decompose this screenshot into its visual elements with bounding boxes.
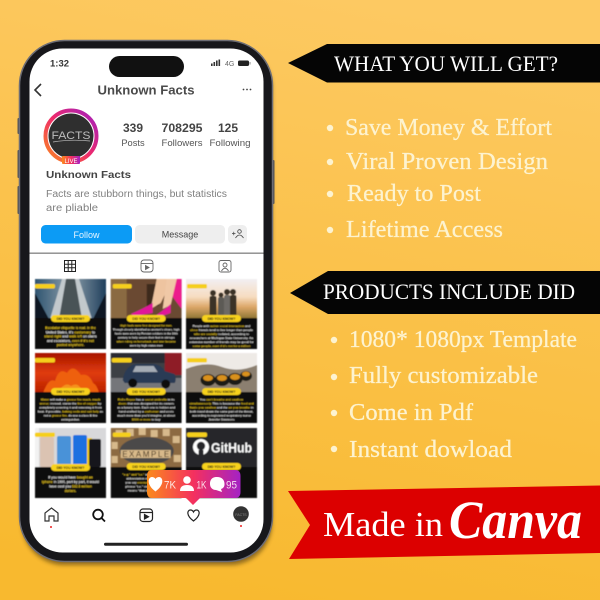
products list: Come in Pdf [349,400,473,426]
post: fire: Water will make a grease fire much, much [41,398,100,402]
add friend button [228,225,247,244]
post: escalator: posted anywhere. [57,343,85,347]
post: luxury car: doors that was designed for its owners [118,402,174,406]
post: luxury car: Rolls-Royce has a secret umbrella in its [118,398,175,402]
post: phones: dollars. [65,489,76,493]
post: escalator: DID YOU KNOW? [57,317,84,321]
post: friends at sunset: some people, even if it's not for a million [193,344,251,348]
post: heels: when riding on horseback, and later became [116,340,176,344]
tab icons [64,260,231,272]
post: fire: heat. If possible, baking soda and salt help as [38,410,103,414]
avatar: LIVE [64,159,78,165]
post: GitHub [185,427,258,499]
banner: products include [290,271,600,314]
post: escalator: Escalator etiquette is real. In the [45,326,96,330]
icon: reels [140,509,152,522]
post: cut fruit: You can't breathe and swallow [200,398,244,402]
post: heels: Though closely identified as women's shoes, high [113,328,180,332]
post: example tiles: phrase "i.e." stands for id est [125,484,167,488]
post: escalator: and escalators, even if it's not [47,339,95,343]
post: luxury car: much more than you'd imagine, at about [117,414,175,418]
icon: heart [149,477,162,492]
post: example tiles: abbreviation of the Latin for [126,476,167,480]
bottom navigation [45,506,249,528]
post: cut fruit: fluids you swallow and the air you breathe in [190,406,254,410]
profile stats: Followers [162,138,203,148]
notification bubble: 95 [226,480,237,492]
avatar [46,110,96,165]
post: GitHub: GitHub [211,440,252,456]
post: cut fruit: both travel down the same part of the throat, [190,410,253,414]
profile stats [121,121,250,148]
post: example tiles: means "that is" in English [128,488,165,492]
banner: what you will get: WHAT YOU WILL GET? [334,51,558,76]
status bar [50,58,250,70]
products list: Instant dowload [349,437,512,463]
icon: person [180,476,194,491]
message button: Message [162,230,198,240]
post: friends at sunset: extensive number of friends may be good for [189,340,254,344]
post: friends at sunset: close friends tend to live longer than people [190,328,253,332]
post: heels: High heels were first designed for men. [120,324,173,328]
post: escalator: United States, it's customary to [46,330,95,334]
ribbon: made in canva: Made in [323,505,443,544]
icon: profile avatar [233,506,249,527]
post: GitHub: GitHub hosts over [207,472,237,476]
post: fire [34,352,107,424]
benefits list: Ready to Post [347,181,481,207]
icon: home [45,508,58,528]
post: escalator: stand right and walk left on stairs [44,335,97,339]
post: luxury car [110,352,182,424]
follow button [41,225,132,244]
post: luxury car: hand-crafted by a craftsman and costs [119,410,174,414]
post: heels: worn by high status men [129,344,163,348]
post: fire: worse; instead, starve the fire of oxygen by [39,402,102,406]
benefits list: Save Money & Effort [345,115,552,141]
banner: products include: PRODUCTS INCLUDE DID [323,279,575,304]
profile stats: 708295 [162,121,203,135]
message button [135,225,225,244]
post: friends at sunset: researchers at Michigan State University. An [190,336,253,340]
post: friends at sunset: who are socially isolated, according to [193,332,249,336]
icon: search [93,510,105,522]
avatar: FACTS [52,130,90,142]
post: friends at sunset: People with active social interaction and [193,324,251,328]
icon: activity heart [188,510,199,521]
notification bubble [147,470,240,505]
home indicator [104,543,188,546]
post: luxury car: DID YOU KNOW? [132,390,160,394]
post: heels: heels were worn by Persian soldiers in the 10th [115,332,178,336]
post: example tiles: you say exempli gratia which [125,480,167,484]
profile bio: are pliable [46,203,98,214]
post: luxury car: as a luxury item. Each one is hidden and [117,406,175,410]
post: GitHub: millions of projects [206,477,237,481]
post: friends at sunset [185,279,258,350]
icon: grid tab [64,260,76,272]
post: fire: extinguisher. [61,418,80,422]
post: phones: have cost you $32.8 million [49,484,92,488]
post grid [35,279,257,498]
post: cut fruit: simultaneously. This is because the food and [189,402,254,406]
profile header [35,84,251,98]
ribbon: made in canva: Canva [449,490,582,550]
post: cut fruit [185,353,258,424]
post: heels: century to help secure their feet in stirrups [118,336,175,340]
products list [331,327,577,463]
post: fire: not a grease fire, do use a class B fire [44,414,98,418]
post: friends at sunset: DID YOU KNOW? [208,317,235,321]
post: fire: DID YOU KNOW? [57,390,84,394]
post: example tiles: "e.g." and "i.e." are not the same. [122,472,170,476]
ribbon: made in canva [288,486,600,559]
post: cut fruit: DID YOU KNOW? [208,390,235,394]
banner: what you will get [288,44,600,82]
follow button: Follow [73,230,100,240]
notification bubble: 7K [164,480,177,492]
profile bio [46,169,227,214]
post: phones: iphone in 1990, part by part, it would [42,480,99,484]
profile header: Unknown Facts [98,84,195,98]
post: GitHub: DID YOU KNOW? [208,465,235,469]
icon: comment bubble [210,477,224,492]
post: phones: If you would have bought an [48,476,93,480]
post: phones: DID YOU KNOW? [57,466,84,470]
post: escalator [34,278,107,350]
post: phones [34,428,107,499]
phone mockup [18,40,274,565]
products list: Fully customizable [349,363,538,389]
products list: 1080* 1080px Template [349,327,577,353]
notification bubble: 1K [196,480,207,492]
profile stats: 125 [218,121,238,135]
benefits list [327,115,552,243]
profile stats: Posts [121,138,145,148]
post: fire: completely covering it and removing it from [39,406,102,410]
icon: reels tab [141,260,153,272]
post: example tiles: EXAMPLE [122,450,169,459]
post: heels: DID YOU KNOW? [132,317,160,321]
benefits list: Viral Proven Design [346,149,548,175]
post: luxury car: $500 or more to buy [132,418,161,422]
profile stats: Following [210,138,250,148]
icon: tagged tab [219,260,231,272]
icon: profile avatar: FACTS [235,513,247,517]
post: cut fruit: according to registered respiratory nurse [192,414,251,418]
status bar: 1:32 [50,58,69,70]
post: example tiles: DID YOU KNOW? [132,465,160,469]
profile bio: Unknown Facts [46,169,131,181]
profile bio: Facts are stubborn things, but statistics [46,189,227,200]
benefits list: Lifetime Access [346,217,503,243]
dynamic island [109,56,184,77]
post: cut fruit: Jennifer Simmons [208,418,235,422]
post: example tiles [110,427,182,499]
post: heels [110,278,182,350]
status bar: 4G [225,61,234,68]
profile stats: 339 [123,121,143,135]
